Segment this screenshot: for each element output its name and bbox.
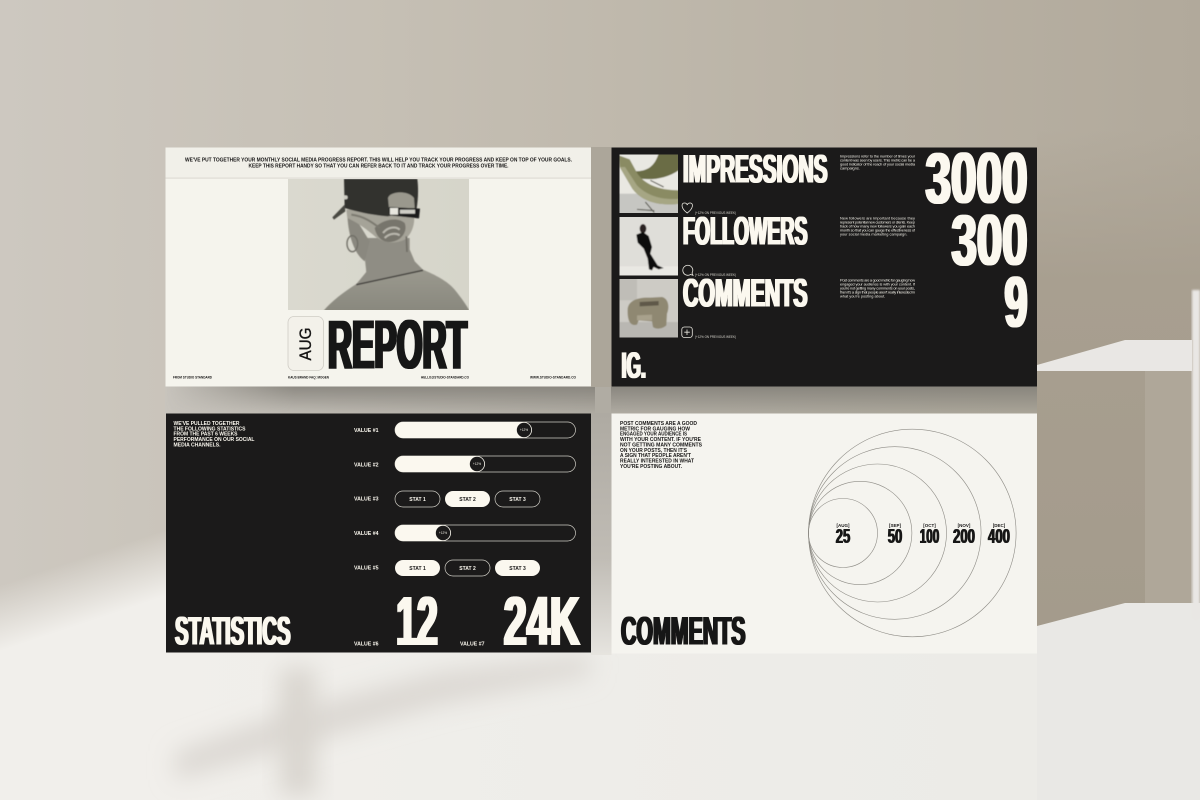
text block: impressions: content was seen by users. This metric can be a <box>840 158 916 162</box>
panel: statistics <box>166 414 591 660</box>
footer contact line <box>173 374 576 380</box>
toggle pills: value 3: STAT 2 <box>459 497 476 503</box>
heading: COMMENTS: COMMENTS <box>683 272 808 316</box>
text block: followers <box>840 216 916 236</box>
value labels: VALUE #4 <box>354 531 379 537</box>
toggle pills: value 3 <box>395 491 540 507</box>
slider: value 4 <box>395 525 576 541</box>
text block: impressions: Impressions refer to the number of times your <box>840 154 916 158</box>
toggle pills: value 5: STAT 2 <box>459 566 476 572</box>
value labels: VALUE #5 <box>354 565 379 571</box>
panel: Instagram metrics: IG. <box>622 345 646 386</box>
icon: add box <box>682 327 692 338</box>
intro text <box>174 421 255 448</box>
panel: report cover <box>166 148 591 386</box>
footer contact line: KAUS BRAND FAQ: MOGEN <box>288 374 329 380</box>
weekly change notes: (+12% ON PREVIOUS WEEK) <box>695 273 736 277</box>
chart labels: 400 <box>988 526 1010 548</box>
text block: comments <box>840 278 916 298</box>
chart labels: [AUG] <box>836 523 850 528</box>
toggle pills: value 3: STAT 1 <box>409 497 426 503</box>
text block: followers: represent potential new customers or clients. Keep <box>840 220 915 224</box>
intro text band: KEEP THIS REPORT HANDY SO THAT YOU CAN REFER BACK TO IT AND TRACK YOUR PROGRESS OVER TIME. <box>248 163 509 169</box>
value labels <box>354 428 485 648</box>
chart labels: 200 <box>953 526 975 548</box>
text block: followers: track of how many new followers you gain each <box>840 224 915 228</box>
intro text: A SIGN THAT PEOPLE AREN'T <box>620 453 692 459</box>
heading: COMMENTS: COMMENTS <box>621 610 746 654</box>
text block: followers: New followers are important because they <box>840 216 915 220</box>
number: 300: 300 <box>952 201 1028 281</box>
chart labels: [OCT] <box>923 523 936 528</box>
chart labels <box>836 523 1010 548</box>
intro text: METRIC FOR GAUGING HOW <box>620 426 690 432</box>
intro text: YOU'RE POSTING ABOUT. <box>620 464 682 470</box>
number: 3000: 3000 <box>926 139 1028 219</box>
text block: comments: Post comments are a good metric for gauging how <box>840 278 915 282</box>
value labels: VALUE #6 <box>354 642 379 648</box>
photo: green lounge chair <box>620 154 678 213</box>
weekly change notes: (+12% ON PREVIOUS WEEK) <box>695 211 736 215</box>
photo: woman in cap from behind <box>288 179 470 311</box>
panel: report cover: REPORT <box>328 306 467 384</box>
intro text: WE'VE PULLED TOGETHER <box>174 421 240 427</box>
intro text: WITH YOUR CONTENT. IF YOU'RE <box>620 437 701 443</box>
slider: value 1 <box>395 422 576 438</box>
text block: followers: your social media marketing campaign. <box>840 232 907 236</box>
text block: comments: engaged your audience is with your content. If <box>840 282 916 286</box>
toggle pills: value 5 <box>395 560 540 576</box>
heading: IMPRESSIONS: IMPRESSIONS <box>683 148 828 192</box>
photo: woman leaning on wall <box>620 217 678 276</box>
footer contact line: FROM STUDIO STANDARD <box>173 374 212 380</box>
intro text: FROM THE PAST 6 WEEKS <box>174 432 238 438</box>
intro text: REALLY INTERESTED IN WHAT <box>620 458 695 464</box>
intro text band: WE'VE PUT TOGETHER YOUR MONTHLY SOCIAL MEDIA PROGRESS REPORT. THIS WILL HELP YOU TRACK YOUR PROGRESS AND KEEP ON TOP OF YOUR GOALS. <box>185 158 572 164</box>
chart labels: 25 <box>836 526 850 548</box>
text block: followers: month so that you can gauge the effectiveness of <box>840 228 916 232</box>
footer contact line: HELLO@STUDIO-STANDARD.CO <box>421 374 469 380</box>
heading: STATISTICS: STATISTICS <box>175 610 290 654</box>
intro text: ENGAGED YOUR AUDIENCE IS <box>620 432 687 438</box>
icon: heart <box>682 203 692 213</box>
panel: Instagram metrics: FOLLOWERS <box>683 210 808 254</box>
number: 12: 12 <box>396 582 438 660</box>
intro text: THE FOLLOWING STATISTICS <box>174 426 246 432</box>
slider: value 1: +12% <box>520 428 528 432</box>
number: 9: 9 <box>1004 263 1028 343</box>
chart labels: [NOV] <box>958 523 971 528</box>
footer contact line: WWW.STUDIO-STANDARD.CO <box>530 374 576 380</box>
number: 24K: 24K <box>504 582 580 660</box>
weekly change notes: (+12% ON PREVIOUS WEEK) <box>695 335 736 339</box>
intro text: POST COMMENTS ARE A GOOD <box>620 421 697 427</box>
photo: beige armchair <box>620 279 678 338</box>
text block: comments: what you're posting about. <box>840 294 885 298</box>
text block: impressions: good indicator of the reach of your social media <box>840 162 916 166</box>
text block: impressions: campaigns. <box>840 166 860 170</box>
weekly change notes <box>695 211 736 339</box>
chart labels: 100 <box>920 526 939 548</box>
slider: value 2 <box>395 456 576 472</box>
value labels: VALUE #2 <box>354 462 379 468</box>
intro text <box>620 421 702 470</box>
intro text: PERFORMANCE ON OUR SOCIAL <box>174 437 255 443</box>
AUG month tag: AUG <box>297 328 315 360</box>
intro text: NOT GETTING MANY COMMENTS <box>620 442 702 448</box>
intro text: ON YOUR POSTS, THEN IT'S <box>620 448 687 454</box>
icon: speech bubble <box>683 265 693 275</box>
toggle pills: value 5: STAT 1 <box>409 566 426 572</box>
panel: comments <box>612 414 1037 654</box>
toggle pills: value 5: STAT 3 <box>509 566 526 572</box>
chart labels: 50 <box>888 526 902 548</box>
value labels: VALUE #3 <box>354 496 379 502</box>
concentric circles chart <box>808 429 1016 637</box>
panel: Instagram metrics <box>612 139 1037 386</box>
chart labels: [SEP] <box>889 523 901 528</box>
slider: value 4: +12% <box>439 531 447 535</box>
value labels: VALUE #1 <box>354 428 379 434</box>
toggle pills: value 3: STAT 3 <box>509 497 526 503</box>
text block: comments: then it's a sign that people aren't really interested in <box>840 290 915 294</box>
slider: value 2: +12% <box>473 462 481 466</box>
intro text band <box>166 148 591 179</box>
text block: comments: you're not getting many comments on your posts, <box>840 286 915 290</box>
intro text: MEDIA CHANNELS. <box>174 442 221 448</box>
value labels: VALUE #7 <box>460 642 485 648</box>
text block: impressions <box>840 154 916 170</box>
AUG month tag <box>288 316 324 370</box>
chart labels: [DEC] <box>993 523 1006 528</box>
